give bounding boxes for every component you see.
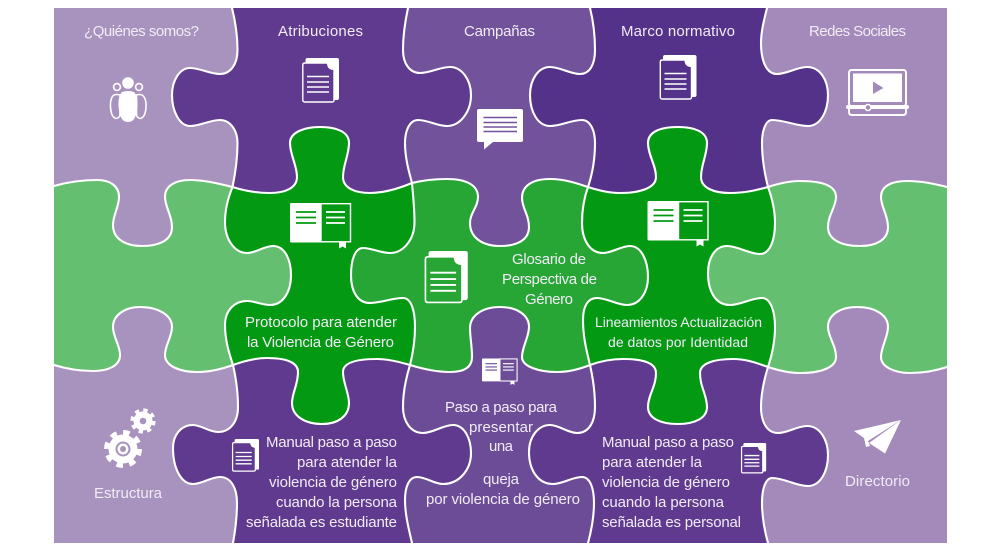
piece: Quiénes somos	[54, 8, 238, 250]
text: Protocolo para atender la Violencia de Género: la Violencia de Género	[247, 334, 394, 351]
text: Paso a paso para presentar una queja	[426, 399, 580, 508]
piece: Paso a paso	[404, 308, 594, 543]
piece: left light green	[54, 181, 290, 371]
piece: right light green	[709, 182, 947, 372]
text: Paso a paso para presentar una queja: presentar	[469, 419, 533, 436]
text: Glosario de Perspectiva de Género	[502, 251, 597, 308]
icon: open book Protocolo	[290, 203, 350, 248]
icon: laptop with play	[846, 70, 909, 115]
icon: document Manual personal	[742, 443, 766, 473]
icon: document Manual estudiante	[233, 439, 259, 471]
piece: Redes Sociales	[762, 8, 947, 245]
icon: open book Lineamientos	[648, 201, 708, 246]
text: Paso a paso para presentar una queja: Paso a paso para	[445, 399, 558, 416]
piece: Atribuciones	[173, 8, 470, 192]
label: Directorio: Directorio	[845, 473, 910, 490]
piece: Estructura	[54, 300, 238, 543]
icon: people	[110, 77, 146, 122]
text: Lineamientos Actualización de datos por Identidad: Lineamientos Actualización	[595, 314, 762, 330]
text: Manual personal	[602, 434, 741, 531]
heading: Redes Sociales: Redes Sociales	[809, 23, 906, 40]
piece: Manual personal	[530, 360, 827, 543]
text: Manual estudiante: Manual paso a paso	[266, 434, 397, 451]
text: Manual estudiante: cuando la persona	[276, 494, 398, 511]
piece: Protocolo	[226, 128, 414, 423]
piece: Campañas	[404, 8, 594, 245]
text: Manual personal: señalada es personal	[602, 514, 741, 531]
text: Manual personal: para atender la	[602, 454, 703, 471]
text: Glosario de Perspectiva de Género: Género	[525, 291, 573, 308]
bottom row of pieces	[54, 300, 947, 543]
text: Paso a paso para presentar una queja: queja	[483, 471, 520, 488]
icon: gears	[106, 410, 154, 466]
icon: document Marco normativo	[660, 55, 696, 99]
piece: Glosario	[352, 180, 647, 371]
text: Manual estudiante: señalada es estudiante	[246, 514, 397, 531]
heading: Campañas: Campañas	[464, 23, 535, 40]
label: Estructura: Estructura	[94, 485, 163, 502]
text: Glosario de Perspectiva de Género: Glosario de	[512, 251, 586, 268]
text: Lineamientos Actualización de datos por Identidad: de datos por Identidad	[608, 334, 748, 350]
text: Protocolo para atender la Violencia de Género: Protocolo para atender	[245, 314, 397, 331]
heading: Marco normativo: Marco normativo	[621, 23, 735, 40]
text: Lineamientos Actualización de datos por Identidad	[595, 314, 762, 350]
icon: document Glosario	[425, 251, 468, 302]
middle row of pieces	[54, 128, 947, 423]
piece: Manual estudiante	[174, 359, 470, 543]
text: Manual estudiante: violencia de género	[269, 474, 397, 491]
text: Manual estudiante: para atender la	[297, 454, 398, 471]
heading: Atribuciones: Atribuciones	[278, 23, 363, 40]
text: Manual personal: Manual paso a paso	[602, 434, 734, 451]
top row of pieces	[54, 8, 947, 250]
icon: paper plane	[854, 420, 901, 454]
text: Protocolo para atender la Violencia de Género	[245, 314, 397, 351]
text: Manual personal: violencia de género	[602, 474, 730, 491]
text: Manual estudiante	[246, 434, 398, 531]
piece: Directorio	[762, 308, 947, 543]
text: Glosario de Perspectiva de Género: Perspectiva de	[502, 271, 597, 288]
text: Paso a paso para presentar una queja: por violencia de género	[426, 491, 580, 508]
text: Manual personal: cuando la persona	[602, 494, 725, 511]
icon: document Atribuciones	[303, 58, 339, 102]
text: Paso a paso para presentar una queja: una	[489, 438, 514, 455]
heading: ¿Quiénes somos?: ¿Quiénes somos?	[84, 23, 199, 40]
icon: open book Paso a paso	[482, 358, 517, 385]
icon: speech bubble	[477, 109, 523, 150]
piece: Lineamientos	[583, 128, 774, 423]
piece: Marco normativo	[531, 8, 827, 192]
